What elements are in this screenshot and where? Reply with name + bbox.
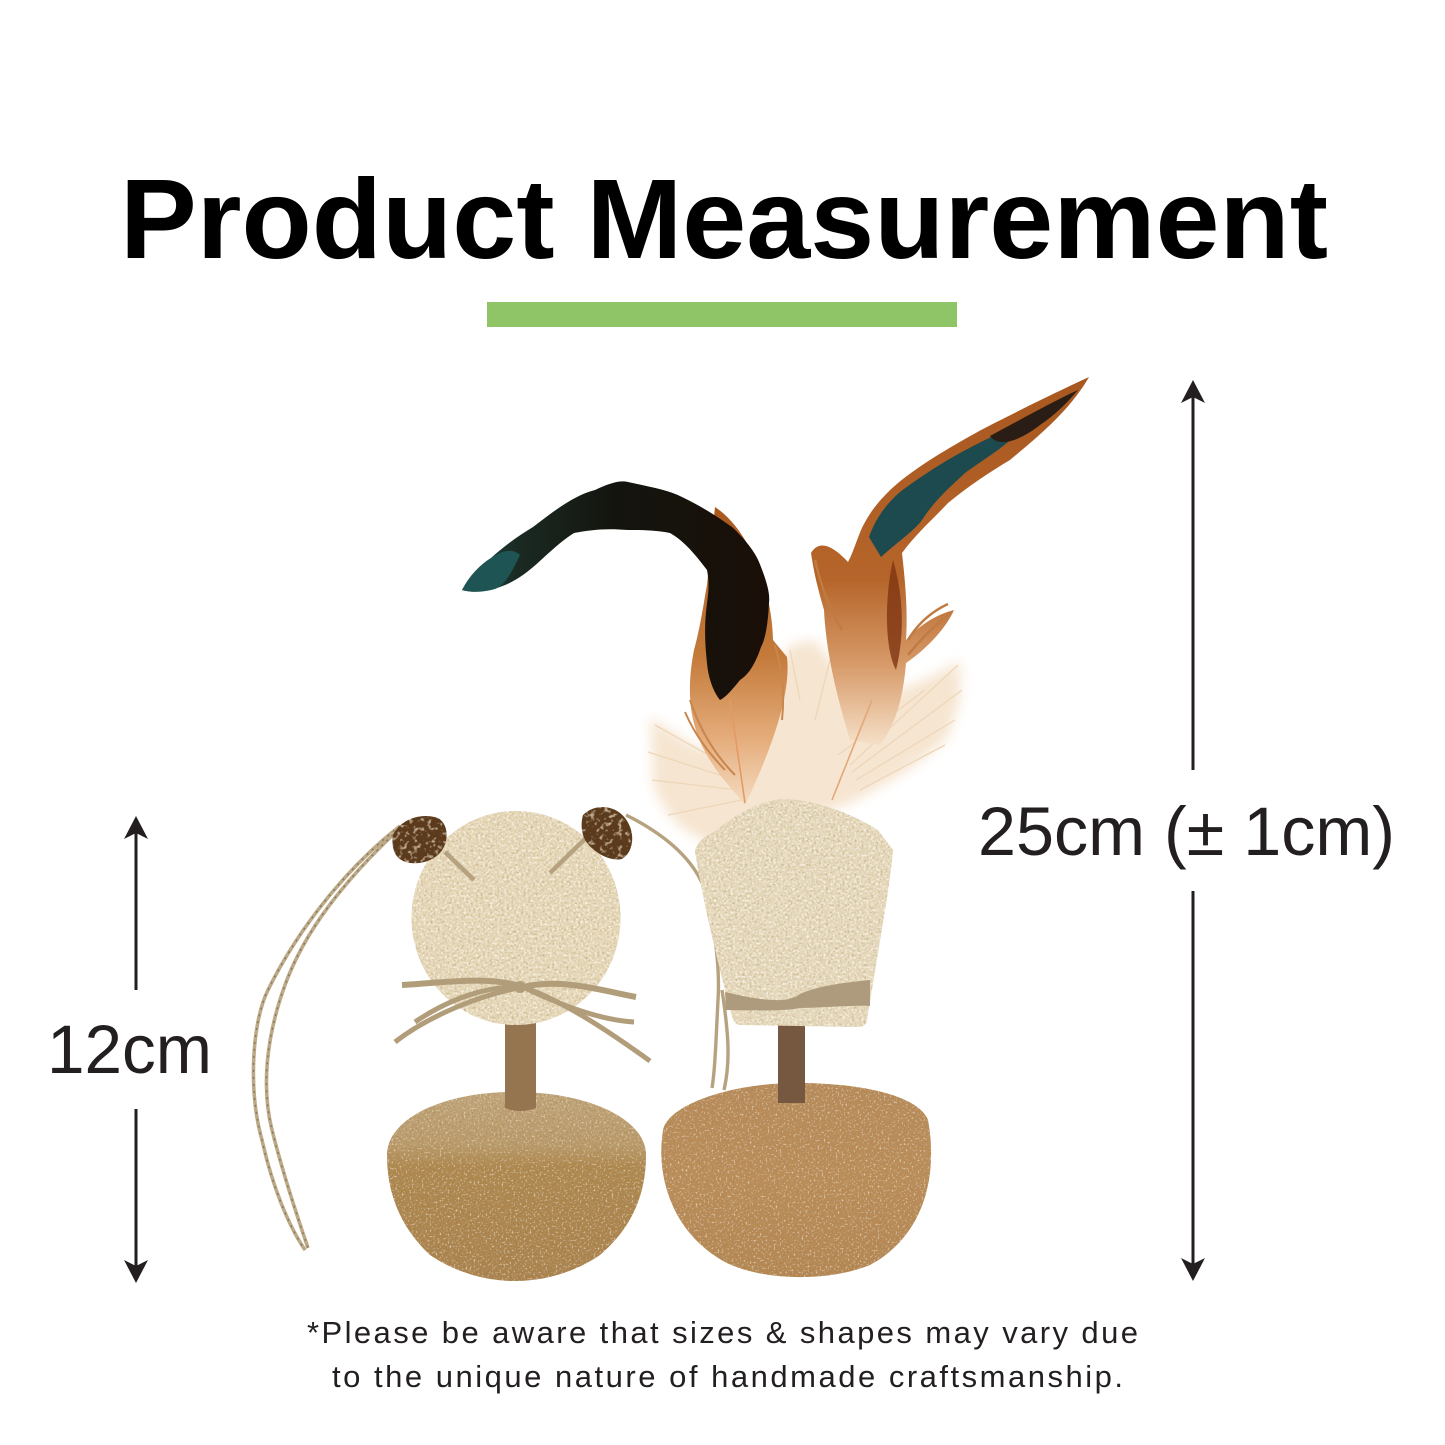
- upper arrow: [1181, 380, 1205, 770]
- teal centre of right feather: [869, 420, 1030, 557]
- title: Product Measurement: [120, 156, 1328, 282]
- wooden stick: [778, 1020, 805, 1104]
- left orange feather body: [690, 507, 788, 805]
- twine bow: [395, 981, 650, 1061]
- cream fluff barbs: [648, 650, 962, 815]
- loofah panel: [695, 799, 893, 1027]
- 25cm dimension: [978, 380, 1395, 1281]
- hanging twine loop: [253, 826, 400, 1250]
- footnote: [307, 1315, 1138, 1394]
- right orange feather body: [811, 377, 1089, 745]
- wooden stick: [505, 1023, 536, 1113]
- cork dome: [387, 1092, 646, 1281]
- lower arrow: [1181, 891, 1205, 1281]
- deep red-brown shading on right feather: [887, 560, 902, 670]
- dark upper band on right feather: [990, 390, 1078, 442]
- rear twine of left toy: [626, 815, 728, 1090]
- label 12cm: 12cm: [47, 1011, 212, 1088]
- stick base: [778, 1083, 805, 1103]
- left feather quill: [730, 700, 745, 803]
- right nut ear: [582, 807, 632, 859]
- 12cm dimension: [47, 816, 212, 1283]
- upper arrow: [124, 816, 148, 990]
- right feather quill: [832, 700, 872, 800]
- footnote: to the unique nature of handmade craftsmanship.: [332, 1359, 1123, 1394]
- loofah disc: [412, 811, 620, 1025]
- left toy: [253, 807, 650, 1281]
- green underline bar: [487, 302, 957, 327]
- right toy: [661, 799, 931, 1277]
- left nut ear: [392, 816, 447, 863]
- feathers: [462, 377, 1089, 850]
- product illustration: two cat toys: [253, 377, 1089, 1281]
- teal tip on left feather: [462, 551, 520, 592]
- footnote: *Please be aware that sizes & shapes may vary due: [307, 1315, 1138, 1350]
- cork bowl: [661, 1083, 931, 1277]
- inner twine from nuts: [445, 838, 586, 880]
- left feather side wisps: [685, 645, 783, 775]
- left dark feather: [462, 481, 769, 700]
- lower arrow: [124, 1109, 148, 1283]
- twine band: [725, 980, 870, 1010]
- right feather side wisps: [815, 560, 952, 655]
- cream fluff: [650, 640, 960, 850]
- label 25cm: 25cm (± 1cm): [978, 793, 1395, 870]
